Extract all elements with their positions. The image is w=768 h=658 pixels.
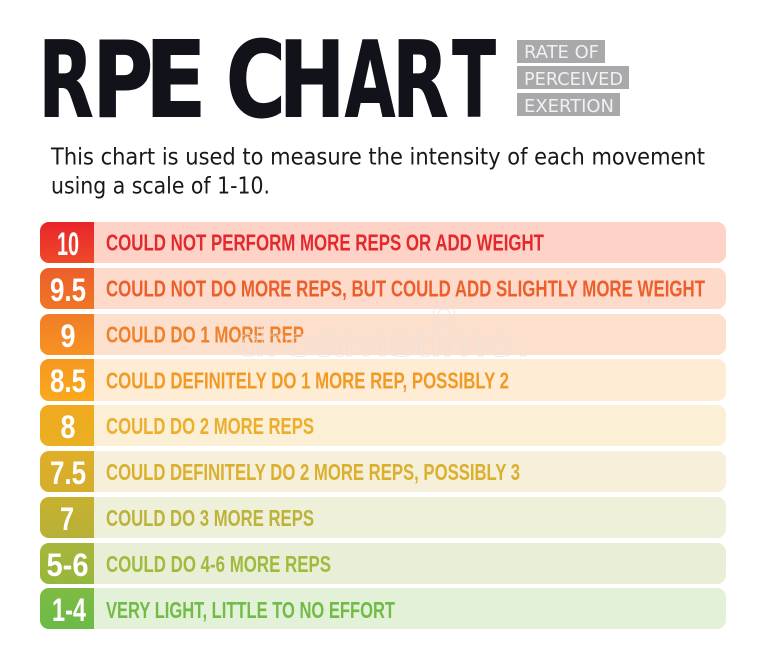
description text — [50, 144, 705, 200]
row: RPE 10: COULD NOT PERFORM MORE REPS OR ADD WEIGHT — [106, 230, 544, 256]
row: RPE 8.5: 8.5 — [50, 363, 86, 399]
row: RPE 8.5 — [40, 359, 726, 401]
row: RPE 1-4: VERY LIGHT, LITTLE TO NO EFFORT — [106, 597, 395, 623]
title: H — [279, 20, 345, 142]
row: RPE 1-4 — [40, 588, 726, 629]
title: T — [452, 20, 496, 142]
row: RPE 9: COULD DO 1 MORE REP — [106, 322, 304, 348]
row: RPE 7 — [40, 497, 726, 538]
description text: This chart is used to measure the intensity of each movement — [50, 144, 705, 170]
row: RPE 5-6: COULD DO 4-6 MORE REPS — [106, 551, 331, 577]
row: RPE 7.5 — [40, 451, 726, 492]
row: RPE 8.5: COULD DEFINITELY DO 1 MORE REP, POSSIBLY 2 — [106, 368, 509, 394]
row: RPE 8: 8 — [60, 409, 76, 445]
row: RPE 5-6: 5-6 — [46, 547, 88, 583]
row: RPE 5-6 — [40, 543, 726, 584]
subtitle tags: rate of perceived exertion — [517, 40, 629, 117]
row: RPE 8: COULD DO 2 MORE REPS — [106, 413, 314, 439]
row: RPE 8 — [40, 405, 726, 446]
row: RPE 10: 10 — [57, 226, 79, 262]
description text: using a scale of 1-10. — [51, 174, 270, 200]
subtitle tags: rate of perceived exertion: EXERTION — [524, 96, 614, 117]
watermark — [236, 304, 531, 365]
row: RPE 9.5: 9.5 — [50, 272, 86, 308]
row: RPE 9 — [40, 314, 726, 355]
title: A — [345, 20, 395, 142]
row: RPE 7.5: 7.5 — [50, 455, 86, 491]
row: RPE 9: 9 — [60, 318, 76, 354]
title: E — [145, 20, 207, 142]
title: C — [226, 20, 286, 142]
subtitle tags: rate of perceived exertion: PERCEIVED — [524, 69, 623, 90]
title — [38, 20, 496, 142]
row: RPE 7: COULD DO 3 MORE REPS — [106, 505, 314, 531]
row: RPE 1-4: 1-4 — [52, 592, 86, 628]
title: P — [92, 20, 153, 142]
RPE scale table — [40, 222, 726, 629]
watermark: dreamstime. — [236, 321, 531, 365]
row: RPE 10 — [40, 222, 726, 263]
title: R — [38, 20, 94, 142]
row: RPE 9.5 — [40, 268, 726, 309]
subtitle tags: rate of perceived exertion: RATE OF — [524, 42, 599, 63]
row: RPE 7: 7 — [60, 501, 74, 537]
row: RPE 7.5: COULD DEFINITELY DO 2 MORE REPS, POSSIBLY 3 — [106, 459, 520, 485]
title: R — [392, 20, 449, 142]
